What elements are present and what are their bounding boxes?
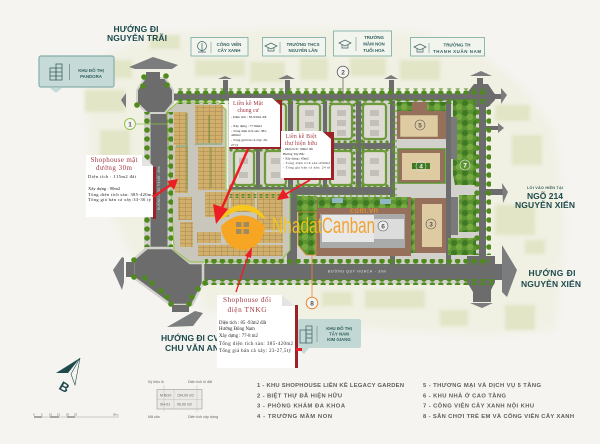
lot key: Diện tích xây dựng (188, 415, 218, 419)
direction arrows (113, 57, 517, 327)
callout: Shophouse mặt đường 30m: Tổng giá bán cả xây:33-36 tỷ (88, 197, 152, 202)
icon: tree (198, 42, 206, 52)
heading: Ngõ 214: NGÕ 214 (527, 191, 563, 201)
callout: Shophouse mặt đường 30m: Diện tích : 115m2 đất (88, 174, 137, 179)
heading: Chu Văn An: CHU VĂN AN (165, 343, 219, 353)
legend: right column (423, 382, 574, 420)
callout: Liền kề Biệt thự hiện hữu: thự hiện hữu (285, 141, 317, 147)
panel: block 4: 4 (419, 164, 423, 170)
heading: Nguyễn Trãi: NGUYỄN TRÃI (107, 32, 167, 43)
road: interior streets (229, 101, 451, 266)
lot key: SH-01 (160, 402, 170, 406)
legend: right column: 5 - THƯƠNG MẠI VÀ DỊCH VỤ 5 TẦNG (423, 382, 541, 389)
marker: 8 (306, 255, 318, 309)
callout: Công viên cây xanh: CÂY XANH (218, 48, 240, 53)
panel: shophouse site (167, 102, 290, 262)
lot key: Diện tích lô đất (188, 380, 212, 384)
callout: Liền kề Mặt chung cư: - Diện tích : 83-93m2 đất (231, 115, 267, 119)
road: top horizontal (170, 94, 495, 100)
legend: left column: 4 - TRƯỜNG MẦM NON (257, 412, 332, 420)
legend: left column (257, 382, 404, 420)
callout: THCS Nguyễn Lân: NGUYỄN LÂN (288, 48, 318, 53)
road label: ĐƯỜNG QUY HOẠCH - 30m (328, 268, 386, 274)
road: left vertical (150, 110, 168, 250)
callout: THCS Nguyễn Lân (262, 38, 326, 56)
panel: block 3: 3 (429, 222, 433, 228)
arrow: west upper (121, 93, 126, 108)
icon: graduation cap (339, 40, 351, 48)
legend: left column: 3 - PHÒNG KHÁM ĐA KHOA (257, 402, 346, 410)
heading: Nguyễn Xiển: HƯỚNG ĐI (528, 267, 576, 278)
mottled green terrain behind the masterplan (85, 28, 565, 335)
callout: Shophouse đối diện TNKG: Tổng giá bán cả xây: 23-27,5tỷ (219, 348, 292, 354)
callout: Shophouse mặt đường 30m: Xây dựng : 90m2 (88, 186, 121, 191)
compass: B (56, 378, 72, 396)
scale bar: 15 (57, 412, 61, 416)
callout: Shophouse đối diện TNKG: Tổng diện tích sàn: 385-420m2 (219, 341, 294, 347)
callout: Shophouse đối diện TNKG: Hướng Đông Nam (219, 327, 255, 332)
callout: TH Thanh Xuân Nam: THANH XUÂN NAM (433, 49, 481, 54)
panel: block 4 (398, 149, 445, 183)
legend: right column: 6 - KHU NHÀ Ở CAO TẦNG (423, 392, 506, 400)
road: bottom-left junction (133, 248, 203, 305)
road: top-left junction (137, 78, 173, 113)
callout: Công viên cây xanh: CÔNG VIÊN (217, 42, 241, 47)
lot key (148, 380, 218, 419)
marker: 8: 8 (310, 300, 314, 308)
arrow: east top (501, 88, 507, 104)
panel: villa blocks (234, 104, 386, 185)
callout: Liền kề Mặt chung cư: Liền kề Mặt (233, 100, 263, 107)
watermark: text (272, 206, 378, 238)
callout: Pandora (39, 56, 114, 93)
compass (56, 358, 80, 396)
legend: left column: 1 - KHU SHOPHOUSE LIỀN KỀ LEGACY GARDEN (257, 382, 404, 389)
scale bar: 0 (33, 412, 35, 416)
scale bar: 20 (66, 412, 70, 416)
street base: sidewalks (144, 100, 495, 284)
road stubs (126, 72, 503, 312)
callout: Pandora: KHU ĐÔ THỊ (78, 68, 104, 73)
road: bottom horizontal (190, 264, 502, 280)
watermark: house logo (220, 205, 266, 250)
heading: Ngõ 214 (515, 185, 575, 210)
callout: Tây Nam Kim Giang (298, 319, 361, 354)
arrow: to villa lots (277, 180, 310, 200)
callout: Liền kề Mặt chung cư: - Tổng giá bán cả xây: 26- (231, 137, 269, 142)
callout: Liền kề Mặt chung cư: 420m2 (231, 133, 241, 137)
callout: Shophouse đối diện TNKG: Xây dựng : 77-8 m2 (219, 334, 258, 339)
panel: park 7: 7 (463, 162, 467, 170)
marker: 2 (337, 66, 349, 102)
callout: Mầm non Tuổi Hoa: TRƯỜNG (364, 35, 384, 40)
lot key: Ký hiệu lô (148, 380, 164, 384)
icon: graduation cap (265, 43, 277, 51)
road label left: ĐƯỜNG LONG THỊ NỞ - 30m (156, 166, 161, 210)
callout: Shophouse đối diện TNKG: Shophouse đối (223, 295, 271, 304)
road: bottom-right junction (467, 256, 495, 292)
watermark: text: Nhadat (272, 213, 322, 238)
icon: building (300, 326, 312, 343)
lot key: 154,00 m2 (177, 394, 194, 398)
lot key: M BGX (160, 394, 172, 398)
panel: block 3 (411, 198, 446, 253)
callout: Tây Nam Kim Giang: KIM GIANG (327, 337, 351, 342)
callout: Liền kề Biệt thự hiện hữu: - Tổng diện tích sàn:450m2 (283, 160, 330, 165)
road: top-right junction (467, 84, 494, 107)
callout: Liền kề Biệt thự hiện hữu: - Diện tích : 90m2 đất (283, 147, 313, 151)
callout: TH Thanh Xuân Nam: TRƯỜNG TH (444, 42, 470, 48)
callout: Shophouse đối diện TNKG: Diện tích : 85 -93m2 đất (219, 321, 267, 326)
arrow: north (129, 57, 178, 69)
panel: block 6 (316, 197, 411, 256)
scale bar: 5 (41, 412, 43, 416)
callout: Shophouse mặt đường 30m: Tổng diện tích sàn: 385-420m2 (88, 192, 155, 197)
marker: 1: 1 (128, 122, 132, 128)
heading: Chu Văn An (161, 332, 219, 353)
callout: Liền kề Mặt chung cư: - Tổng diện tích sàn: 385- (231, 128, 268, 133)
arrow: west lower (113, 257, 124, 290)
callout: Shophouse mặt đường 30m: đường 30m (96, 164, 133, 172)
arrow: east main (502, 245, 517, 297)
panel: block 6: 6 (381, 224, 385, 230)
callout: Shophouse đối diện TNKG: điện TNKG (228, 305, 267, 314)
heading: Nguyễn Trãi (107, 23, 167, 43)
callout: Liền kề Biệt thự hiện hữu: Hướng Tây Bắc (283, 151, 305, 156)
legend: left column: 2 - BIỆT THỰ ĐÃ HIỆN HỮU (257, 392, 342, 400)
marker: 2: 2 (341, 70, 345, 76)
callout: Liền kề Biệt thự hiện hữu: Liền kề Biệt (286, 133, 317, 140)
callout: Liền kề Mặt chung cư: chung cư (237, 108, 260, 114)
legend: right column: 8 - SÂN CHƠI TRẺ EM VÀ CÔNG VIÊN CÂY XANH (423, 412, 574, 420)
callout: Tây Nam Kim Giang: KHU ĐÔ THỊ (326, 326, 352, 331)
scale bar: 50m (113, 412, 119, 416)
panel: block 5 (397, 102, 446, 139)
heading: Ngõ 214: LỐI VÀO HIỆN TẠI (527, 185, 563, 190)
callout: Mầm non Tuổi Hoa (334, 31, 392, 56)
callout: Shophouse mặt đường 30m (86, 155, 156, 219)
arrow: south (167, 311, 203, 327)
arrow: to opposite lots (236, 247, 252, 292)
heading: Nguyễn Xiển (521, 267, 581, 289)
watermark: text: com.vn (350, 206, 378, 215)
callout: Tây Nam Kim Giang: TÂY NAM (329, 332, 349, 336)
callout: Mầm non Tuổi Hoa: TUỔI HOA (363, 48, 386, 53)
heading: Nguyễn Xiển: NGUYỄN XIỂN (521, 278, 581, 289)
callout: THCS Nguyễn Lân: TRƯỜNG THCS (286, 42, 320, 47)
callout: TH Thanh Xuân Nam (410, 38, 484, 56)
lot key: Mã căn (148, 415, 160, 419)
callout: Pandora: PANDORA (80, 74, 103, 79)
legend: right column: 7 - CÔNG VIÊN CÂY XANH NỘI KHU (423, 402, 534, 410)
icon: building (50, 64, 62, 80)
lots: shophouse rows (174, 105, 283, 256)
panel: block 5: 5 (418, 122, 422, 130)
scale bar: 10 (49, 412, 53, 416)
arrow: south east (470, 303, 493, 308)
arrow: east middle (498, 123, 504, 133)
road: right vertical (479, 100, 486, 260)
panel: park 7 (448, 100, 476, 255)
heading: Nguyễn Trãi: HƯỚNG ĐI (114, 23, 158, 34)
roads (126, 72, 503, 312)
scale bar: 25 (74, 412, 78, 416)
icon: graduation cap (414, 44, 426, 52)
arrow stubs north (218, 76, 232, 79)
street trees (131, 73, 495, 307)
callout: Shophouse mặt đường 30m: Shophouse mặt (90, 156, 138, 164)
arrow: to shophouse 30m (153, 179, 178, 197)
heading: Chu Văn An: HƯỚNG ĐI CV (161, 332, 219, 343)
arrow: east entrance (502, 183, 508, 203)
marker: 1 (124, 118, 167, 130)
red tag (296, 348, 302, 351)
panel: playground park 8 (297, 196, 317, 255)
heading: Ngõ 214: NGUYỄN XIỂN (515, 199, 575, 210)
callout: Liền kề Mặt chung cư (229, 98, 282, 149)
callout: Liền kề Biệt thự hiện hữu: - Xây dựng : 85m2 (283, 156, 309, 160)
callout: Liền kề Biệt thự hiện hữu: - Tổng giá bán cả xây: 24 tỷ (283, 164, 330, 170)
callout: Shophouse đối diện TNKG (217, 295, 298, 368)
callout: Liền kề Mặt chung cư: 27 tỷ (231, 143, 238, 147)
arrow: to chung cư lots (213, 149, 248, 224)
callout: Liền kề Biệt thự hiện hữu (281, 131, 334, 180)
callout: Liền kề Mặt chung cư: - Xây dựng : 77.84m2 (231, 124, 262, 128)
watermark: text: Canban (322, 213, 375, 238)
callout: Công viên cây xanh (191, 38, 248, 56)
callout: Mầm non Tuổi Hoa: MẦM NON (363, 42, 385, 46)
scale bar (33, 412, 119, 417)
lot key: 90,00 m2 (177, 402, 192, 406)
